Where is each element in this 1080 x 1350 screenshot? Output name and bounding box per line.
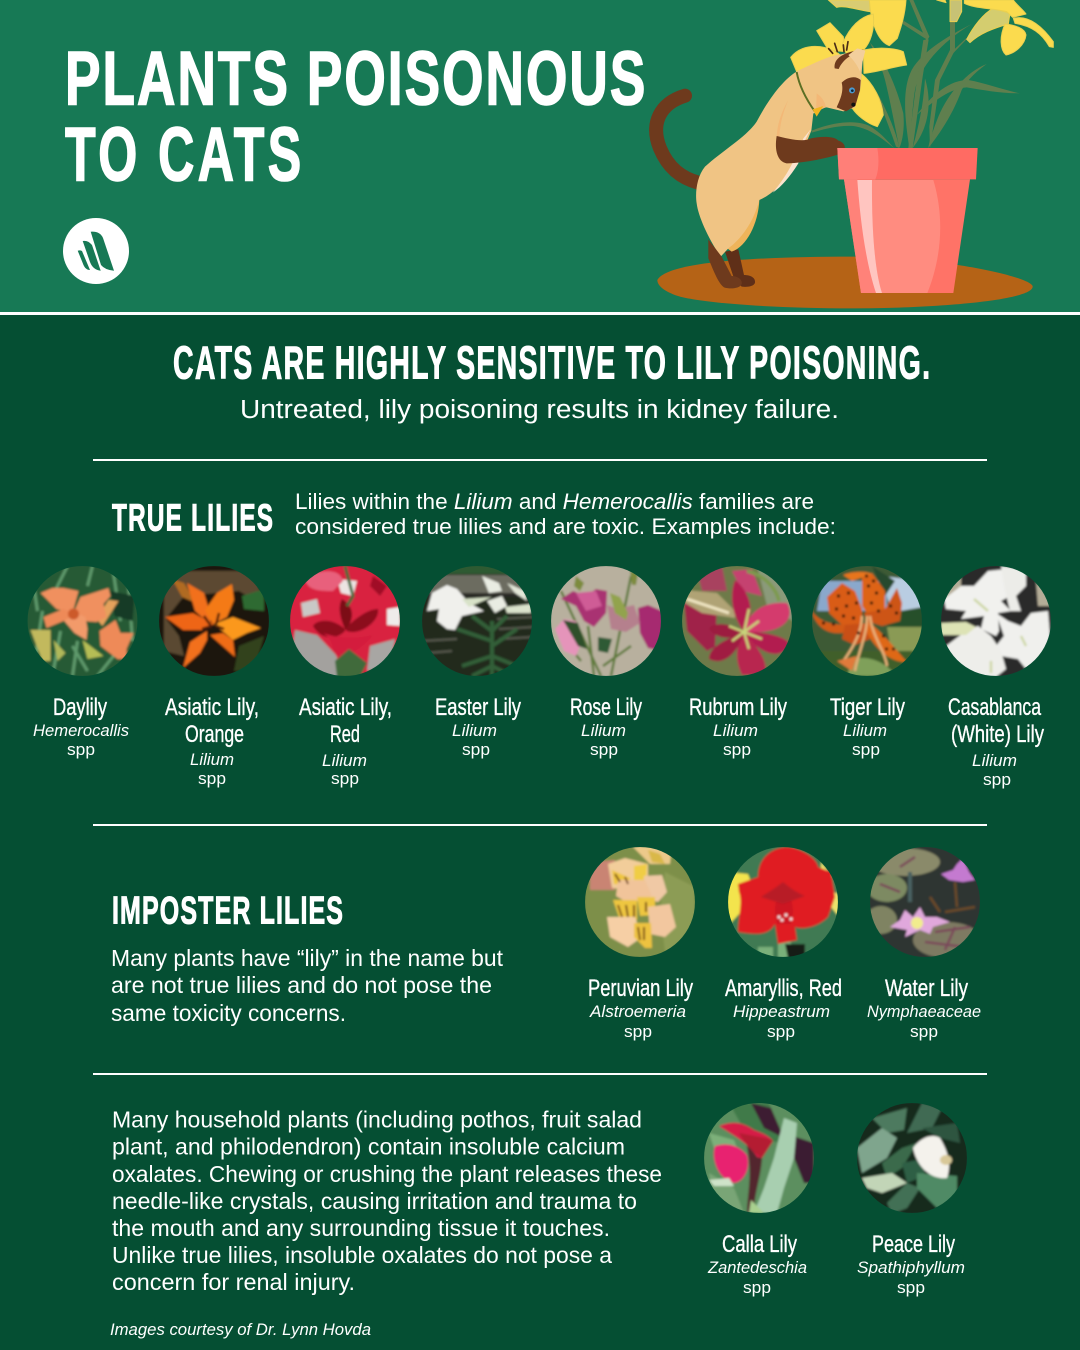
name: rose lily: Rose Lily <box>570 694 642 721</box>
name: easter lily: Easter Lily <box>435 694 521 721</box>
photo: peace lily <box>856 1102 968 1214</box>
species: Alstroemeria <box>589 1003 686 1021</box>
text: insoluble oxalates description: Unlike true lilies, insoluble oxalates do not pose a <box>112 1242 613 1268</box>
illustration: cat sniffing potted lily <box>656 0 1053 308</box>
species: Lilium <box>843 722 887 740</box>
species: Lilium <box>190 751 234 769</box>
card: rubrum lily <box>681 565 793 759</box>
text: imposter lilies description: are not true lilies and do not pose the <box>111 972 492 998</box>
panel: true lilies <box>26 489 1052 789</box>
photo: rubrum lily <box>681 565 793 677</box>
text: insoluble oxalates description: Many household plants (including pothos, fruit salad <box>112 1106 642 1132</box>
photo: asiatic lily red <box>289 565 401 677</box>
plant leaves and stems <box>812 0 1020 148</box>
title: TO CATS <box>65 112 301 197</box>
photo: easter lily <box>421 565 533 677</box>
title: PLANTS POISONOUS <box>65 36 645 121</box>
lily flowers <box>791 0 1053 127</box>
text: insoluble oxalates description: concern for renal injury. <box>112 1269 355 1295</box>
divider <box>93 1073 987 1075</box>
ear and face mask <box>835 49 864 69</box>
text: true lilies description <box>295 489 836 539</box>
eye <box>849 87 855 93</box>
species: Hippeastrum <box>733 1003 830 1021</box>
card: tiger lily: spp <box>852 741 880 759</box>
heading: true lilies: TRUE LILIES <box>112 496 273 539</box>
photo: casablanca lily <box>940 565 1052 677</box>
text: insoluble oxalates description: plant, and philodendron) contain insoluble calcium <box>112 1134 625 1160</box>
tail <box>656 96 698 183</box>
card: asiatic lily orange: Orange <box>185 721 244 748</box>
anther stamens <box>829 42 848 53</box>
name: amaryllis: Amaryllis, Red <box>725 975 842 1002</box>
front arm <box>776 136 845 163</box>
name: peace lily: Peace Lily <box>872 1231 955 1258</box>
haunch shadow <box>727 200 759 252</box>
card: easter lily: spp <box>462 741 490 759</box>
card: peace lily <box>856 1102 968 1297</box>
panel: insoluble oxalates <box>112 1102 968 1297</box>
name: water lily: Water Lily <box>885 975 968 1002</box>
card: water lily: spp <box>910 1023 938 1041</box>
name: asiatic lily orange: Asiatic Lily, <box>165 694 259 721</box>
flower pot <box>844 179 970 293</box>
collar <box>797 72 815 112</box>
card: calla lily <box>703 1102 815 1297</box>
text: true lilies description: considered true lilies and are toxic. Examples include: <box>295 514 836 539</box>
belly highlight <box>773 129 811 193</box>
photo: peruvian lily <box>584 846 696 958</box>
card: tiger lily <box>811 565 923 759</box>
species: Lilium <box>581 722 626 740</box>
photo: tiger lily <box>811 565 923 677</box>
card: asiatic lily orange <box>158 565 270 788</box>
card: rose lily: spp <box>590 741 618 759</box>
card: peruvian lily <box>584 846 696 1041</box>
heading: imposter lilies: IMPOSTER LILIES <box>112 889 343 932</box>
cat body and head <box>696 50 864 257</box>
text: insoluble oxalates description: needle-like crystals, causing irritation and trauma to <box>112 1188 637 1214</box>
text: insoluble oxalates description: the mouth and any surrounding tissue it touches. <box>112 1215 610 1241</box>
divider <box>93 459 987 461</box>
divider <box>93 824 987 826</box>
icon: logo <box>63 218 129 284</box>
image credit: Images courtesy of Dr. Lynn Hovda <box>110 1320 371 1339</box>
text: insoluble oxalates description <box>112 1106 662 1295</box>
species: Nymphaeaceae <box>867 1003 981 1021</box>
species: Lilium <box>452 722 497 740</box>
photo: amaryllis <box>727 846 839 958</box>
name: tiger lily: Tiger Lily <box>830 694 905 721</box>
ground shadow <box>657 257 1033 308</box>
card: peruvian lily: spp <box>624 1023 652 1041</box>
photo: water lily <box>865 846 981 958</box>
card: easter lily <box>421 565 533 759</box>
text: true lilies description: Lilies within the Lilium and Hemerocallis families are <box>295 489 814 514</box>
species: Zantedeschia <box>707 1259 807 1277</box>
card: asiatic lily red: Red <box>330 721 360 748</box>
card: peace lily: spp <box>897 1279 925 1297</box>
card: asiatic lily red <box>289 565 401 788</box>
name: rubrum lily: Rubrum Lily <box>689 694 787 721</box>
species: Lilium <box>713 722 758 740</box>
card: casablanca lily <box>940 565 1052 789</box>
card: rubrum lily: spp <box>723 741 751 759</box>
name: casablanca lily: Casablanca <box>948 694 1041 721</box>
card: asiatic lily orange: spp <box>198 770 226 788</box>
card: asiatic lily red: spp <box>331 770 359 788</box>
card: rose lily <box>550 565 662 759</box>
name: daylily: Daylily <box>53 694 107 721</box>
card: daylily: spp <box>67 741 95 759</box>
photo: calla lily <box>703 1102 815 1214</box>
card: casablanca lily: spp <box>983 771 1011 789</box>
name: asiatic lily red: Asiatic Lily, <box>299 694 392 721</box>
far hind leg <box>725 249 755 287</box>
heading: lily sensitivity: CATS ARE HIGHLY SENSITIVE TO LILY POISONING. <box>173 338 930 389</box>
card: casablanca lily: (White) Lily <box>951 721 1044 748</box>
chest shade <box>777 100 788 137</box>
species: Lilium <box>972 752 1017 770</box>
panel: header <box>0 0 1080 315</box>
subheading: kidney failure: Untreated, lily poisoning results in kidney failure. <box>240 396 839 424</box>
photo: daylily <box>26 565 138 677</box>
text: imposter lilies description: same toxicity concerns. <box>111 1000 346 1026</box>
near hind leg <box>708 239 742 288</box>
card: amaryllis: spp <box>767 1023 795 1041</box>
panel: imposter lilies <box>111 846 981 1041</box>
name: calla lily: Calla Lily <box>722 1231 797 1258</box>
species: Hemerocallis <box>33 722 129 740</box>
text: insoluble oxalates description: oxalates. Chewing or crushing the plant releases these <box>112 1161 662 1187</box>
title <box>65 36 645 197</box>
species: Spathiphyllum <box>857 1259 965 1277</box>
name: peruvian lily: Peruvian Lily <box>588 975 693 1002</box>
text: imposter lilies description: Many plants have “lily” in the name but <box>111 945 503 971</box>
photo: orange asiatic lily <box>158 565 270 677</box>
card: calla lily: spp <box>743 1279 771 1297</box>
card: daylily <box>26 565 138 759</box>
text: imposter lilies description <box>111 945 503 1026</box>
card: water lily <box>865 846 981 1041</box>
species: Lilium <box>322 752 367 770</box>
photo: rose lily <box>550 565 662 677</box>
card: amaryllis <box>725 846 842 1041</box>
